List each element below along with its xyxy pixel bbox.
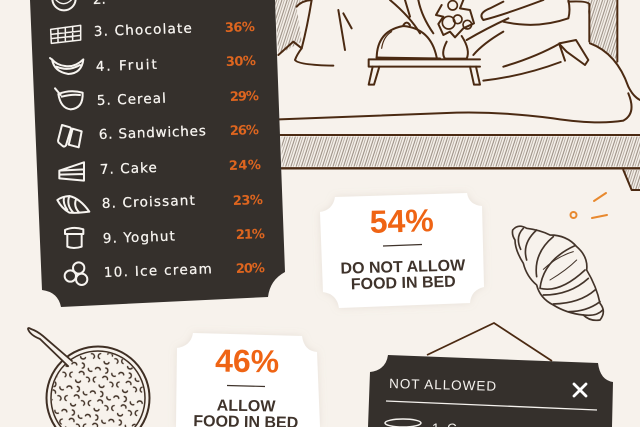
icon: yoghurt	[65, 228, 83, 248]
panel: top foods chalkboard	[30, 0, 285, 307]
sign shape	[368, 355, 613, 427]
row 7 value: 24%	[229, 158, 261, 174]
caption: DO NOT ALLOW	[340, 257, 466, 278]
panel: not allowed sign	[368, 323, 613, 427]
row 4: 4. Fruit	[96, 57, 157, 75]
value: 46%	[215, 342, 280, 380]
icon: cross	[574, 384, 586, 396]
row 8: 8. Croissant	[102, 193, 195, 212]
pillow	[278, 0, 433, 66]
sign heading: NOT ALLOWED	[389, 376, 497, 394]
tray	[369, 59, 480, 85]
icon: chocolate	[51, 25, 81, 43]
callout: 54% do not allow	[320, 193, 484, 308]
icon: item 2	[52, 0, 76, 10]
row 3 value: 36%	[225, 20, 255, 36]
icon: cereal bowl with spoon	[28, 328, 150, 427]
icon: croissant	[57, 196, 89, 213]
row 4 value: 30%	[226, 54, 256, 70]
list rows	[93, 0, 265, 281]
seated person	[467, 0, 589, 81]
icon: cake	[59, 162, 84, 181]
row 6 value: 26%	[230, 123, 259, 139]
divider	[383, 244, 422, 246]
row 5 value: 29%	[230, 89, 259, 105]
divider	[386, 401, 597, 410]
caption: ALLOW	[217, 397, 276, 416]
row 10: 10. Ice cream	[104, 261, 212, 281]
value: 54%	[369, 202, 434, 240]
board shape	[30, 0, 285, 307]
icons for the list	[50, 0, 89, 285]
icon: orange sparks	[570, 193, 607, 218]
flowers in vase	[436, 0, 474, 59]
divider	[227, 386, 265, 387]
hanging string	[427, 323, 552, 361]
row 10 value: 20%	[236, 261, 265, 277]
caption: FOOD IN BED	[351, 274, 456, 293]
row 8 value: 23%	[233, 193, 263, 209]
cloche	[377, 23, 440, 59]
blanket and mattress	[279, 0, 640, 190]
callout: 46% allow	[176, 333, 320, 427]
ticket shape	[320, 193, 484, 308]
icon: sandwiches	[58, 125, 82, 147]
icon: croissant	[512, 226, 603, 320]
row 3: 3. Chocolate	[94, 21, 192, 40]
icon: ice cream scoops	[65, 262, 87, 285]
illustration: bed with breakfast tray	[275, 0, 640, 190]
icon: banana	[50, 58, 83, 74]
row 7: 7. Cake	[100, 160, 157, 178]
row 9: 9. Yoghut	[103, 228, 175, 247]
row 5: 5. Cereal	[97, 91, 166, 109]
icon: cereal bowl	[55, 88, 83, 109]
wall hatching	[275, 0, 640, 190]
row 9 value: 21%	[236, 227, 265, 243]
ticket shape	[176, 333, 320, 427]
icon: item 1	[385, 419, 421, 427]
row 6: 6. Sandwiches	[99, 123, 206, 143]
